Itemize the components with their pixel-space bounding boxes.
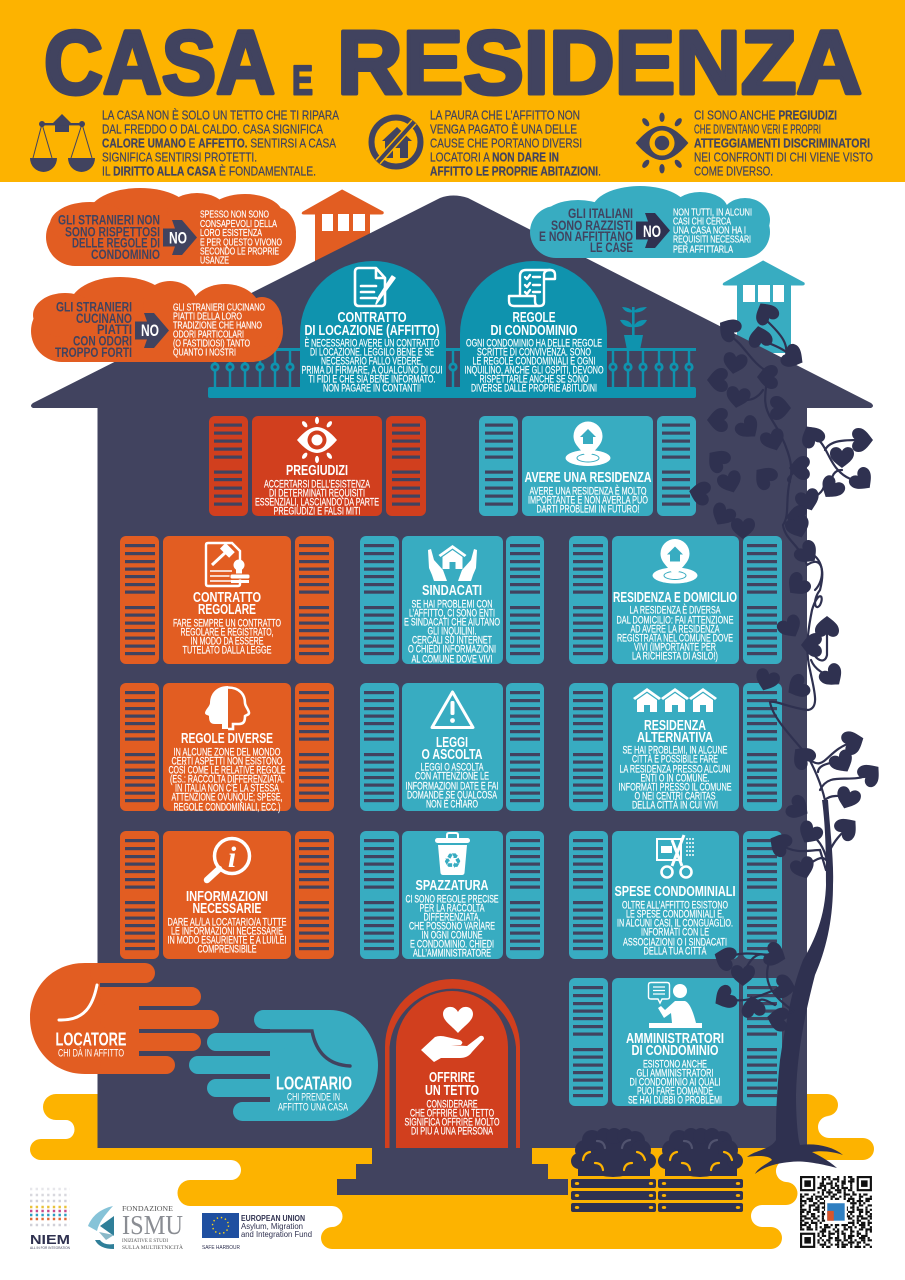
heading: ALTERNATIVA	[637, 730, 713, 746]
claim: DELLE REGOLE DI	[72, 236, 160, 250]
text: IMPORTANTE E NON AVERLA PUÒ	[528, 494, 648, 507]
text: LA CASA NON È SOLO UN TETTO CHE TI RIPARA	[102, 108, 339, 122]
logo: European Union fund	[202, 1213, 312, 1251]
claim: TROPPO FORTI	[55, 345, 132, 360]
icon: warning triangle	[432, 692, 473, 728]
panel: informazioni necessarie	[120, 831, 334, 959]
text: ENTI O IN COMUNE.	[640, 773, 710, 785]
text	[464, 338, 604, 395]
text: REGOLE CONDOMINIALI, ECC.)	[174, 801, 280, 813]
text: DARE AL/LA LOCATARIO/A TUTTE	[168, 917, 286, 929]
text: LA RICHIESTA DI ASILO!)	[632, 651, 718, 663]
logo: NIEM	[30, 1189, 70, 1250]
text: DARTI PROBLEMI IN FUTURO!	[536, 504, 640, 516]
text: PRIMA DI FIRMARE, A QUALCUNO DI CUI	[302, 365, 442, 377]
text: DI PIÙ A UNA PERSONA	[411, 1125, 494, 1138]
claim	[55, 300, 132, 360]
text: DOMANDE SE QUALCOSA	[407, 790, 498, 802]
house	[31, 196, 873, 1148]
claim: SONO RISPETTOSI	[65, 224, 160, 240]
cloud: stranieri regole	[46, 188, 296, 267]
heading: AMMINISTRATORI	[626, 1031, 724, 1047]
text: CON ATTENZIONE LE	[415, 771, 489, 783]
intro block: pregiudizi	[636, 108, 873, 178]
heading: INFORMAZIONI	[186, 889, 268, 905]
icon: no house	[372, 118, 420, 166]
logo: European Union fund: SAFE HARBOUR	[202, 1245, 240, 1251]
icon: scissors and bill	[657, 835, 695, 878]
text	[694, 108, 873, 178]
text	[528, 485, 648, 516]
text: E SINDACATI CHE AIUTANO	[404, 617, 500, 629]
text: ESISTONO ANCHE	[643, 1059, 707, 1071]
text: PER LA RACCOLTA	[420, 903, 485, 915]
heading: OFFRIRE	[429, 1070, 475, 1086]
panel: regole di condominio	[460, 261, 607, 398]
answer: CASI CHI CERCA	[673, 217, 731, 228]
QR code	[800, 1176, 872, 1248]
text: INQUILINO, ANCHE GLI OSPITI, DEVONO	[464, 365, 604, 377]
icon: location pin	[652, 539, 698, 584]
heading: SPAZZATURA	[416, 878, 489, 894]
icon: eye	[297, 417, 337, 463]
text: DIFFERENZIATA,	[424, 912, 480, 924]
answer: (O FASTIDIOSI) TANTO	[173, 339, 250, 350]
text: LE INFORMAZIONI NECESSARIE	[171, 926, 283, 938]
claim: E NON AFFITTANO	[539, 229, 633, 244]
arrow: no: NO	[169, 228, 187, 248]
intro block: diritto alla casa	[30, 108, 339, 178]
heading	[422, 735, 483, 763]
text: COSÌ COME LE RELATIVE REGOLE	[168, 764, 286, 777]
icon: hands holding house	[428, 545, 477, 581]
text: È NECESSARIO AVERE UN CONTRATTO	[304, 337, 440, 350]
heading	[637, 718, 713, 746]
answer: GLI STRANIERI CUCINANO	[173, 303, 265, 314]
text: CI SONO REGOLE PRECISE	[406, 894, 498, 906]
heading: LEGGI	[436, 735, 468, 751]
cloud: italiani	[530, 186, 770, 258]
logo: European Union fund: and Integration Fund	[241, 1230, 312, 1239]
text: VENGA PAGATO È UNA DELLE	[430, 122, 577, 136]
arrow: no: NO	[643, 222, 661, 241]
text: ATTEGGIAMENTI DISCRIMINATORI	[694, 136, 870, 150]
icon: recycling bin	[435, 833, 470, 875]
panel: residenza alternativa	[569, 683, 782, 812]
heading: RESIDENZA E DOMICILIO	[613, 590, 737, 606]
panel: residenza e domicilio	[569, 536, 782, 664]
heading: SINDACATI	[422, 583, 482, 599]
answer: QUANTO I NOSTRI	[173, 348, 236, 359]
heading: PREGIUDIZI	[286, 463, 348, 479]
text: INFORMAZIONI DATE E FAI	[406, 781, 498, 793]
balcony	[208, 348, 696, 398]
text: LE SPESE CONDOMINIALI E,	[626, 909, 724, 921]
heading: UN TETTO	[425, 1083, 479, 1099]
text: CAUSE CHE PORTANO DIVERSI	[430, 136, 582, 150]
hand: locatore	[30, 963, 219, 1074]
panel: spazzatura	[360, 831, 544, 960]
heading	[193, 590, 261, 618]
text: LOCATORI A NON DARE IN	[430, 150, 559, 164]
text: E CONDOMINIO. CHIEDI	[410, 939, 494, 951]
icon: location pin	[566, 422, 610, 466]
yellow ground	[30, 1094, 874, 1249]
heading: DI CONDOMINIO	[490, 323, 578, 339]
title: CASA	[44, 14, 275, 114]
text: REGISTRATA NEL COMUNE DOVE	[617, 633, 733, 645]
text: VIVI (IMPORTANTE PER	[634, 642, 716, 654]
text: INFORMATI PRESSO IL COMUNE	[618, 782, 732, 794]
text: AVERE UNA RESIDENZA È MOLTO	[530, 485, 646, 498]
title: RESIDENZA	[337, 14, 862, 114]
text: IN OGNI COMUNE	[422, 930, 482, 942]
claim: CONDOMINIO	[91, 247, 160, 262]
answer: PIATTI DELLA LORO	[173, 312, 242, 323]
text	[406, 762, 498, 811]
text: ASSOCIAZIONI O I SINDACATI	[623, 937, 727, 949]
text: DI CONDOMINIO AI QUALI	[630, 1077, 720, 1089]
text: SE HAI DUBBI O PROBLEMI	[628, 1095, 722, 1107]
text: (ES.: RACCOLTA DIFFERENZIATA.	[170, 774, 284, 786]
text: LA RESIDENZA È DIVERSA	[630, 604, 721, 617]
text: LEGGI O ASCOLTA	[420, 762, 484, 774]
text: AL COMUNE DOVE VIVI	[412, 653, 492, 665]
text: IN ITALIA NON C’È LA STESSA	[175, 782, 280, 795]
text	[404, 1099, 500, 1138]
text: O CHIEDI INFORMAZIONI	[408, 644, 496, 656]
icon: checklist scroll	[509, 270, 555, 306]
text: ACCERTARSI DELL’ESISTENZA	[264, 479, 371, 491]
claim: PIATTI	[97, 322, 132, 337]
heading: AVERE UNA RESIDENZA	[524, 470, 652, 486]
label: CHI PRENDE IN	[287, 1092, 340, 1104]
text: DELLA CITTÀ IN CUI VIVI	[632, 799, 718, 812]
heading: DI LOCAZIONE (AFFITTO)	[304, 323, 440, 339]
text: CHE POSSONO VARIARE	[409, 921, 495, 933]
text: OLTRE ALL’AFFITTO ESISTONO	[622, 900, 728, 912]
text: CITTÀ È POSSIBILE FARE	[632, 753, 718, 766]
text: IL DIRITTO ALLA CASA È FONDAMENTALE.	[102, 164, 316, 178]
text: SIGNIFICA OFFRIRE MOLTO	[404, 1117, 500, 1129]
text: LA PAURA CHE L’AFFITTO NON	[430, 108, 580, 122]
text: O NEI CENTRI CARITAS	[634, 791, 716, 803]
text: L’AFFITTO, CI SONO ENTI	[409, 608, 495, 620]
icon: scales with house	[30, 114, 95, 172]
claim: CUCINANO	[76, 311, 132, 326]
text	[617, 900, 733, 958]
text	[168, 747, 286, 813]
text: CERTI ASPETTI NON ESISTONO	[172, 756, 282, 768]
panel: amministratori di condominio	[569, 978, 782, 1107]
arrow: no: NO	[141, 321, 159, 340]
text: NECESSARIO FALLO VEDERE,	[321, 356, 423, 368]
claim: LE CASE	[590, 240, 633, 255]
heading	[490, 310, 578, 339]
text: REGOLARE E REGISTRATO,	[180, 627, 274, 639]
answer: LORO ESISTENZA	[200, 228, 262, 239]
heading: CONTRATTO	[338, 310, 406, 326]
text: PREGIUDIZI E FALSI MITI	[274, 506, 360, 518]
answer	[200, 210, 282, 267]
text: DAL DOMICILIO: FAI ATTENZIONE	[616, 615, 734, 627]
text: CHE OFFRIRE UN TETTO	[410, 1108, 494, 1120]
icon: document gavel stamp	[206, 543, 250, 586]
text: IN MODO DA ESSERE	[190, 636, 264, 648]
answer: CONSAPEVOLI DELLA	[200, 219, 277, 230]
answer	[673, 208, 752, 256]
text: TUTELATO DALLA LEGGE	[182, 645, 272, 657]
answer	[173, 303, 265, 359]
icon: administrator speaking	[648, 982, 702, 1028]
header band	[0, 0, 905, 182]
text: CI SONO ANCHE PREGIUDIZI	[694, 108, 837, 122]
text: LE REGOLE CONDOMINIALI E OGNI	[472, 356, 596, 368]
text: SCRITTE DI CONVIVENZA. SONO	[477, 347, 591, 359]
cloud: stranieri odori	[31, 277, 283, 362]
left chimney	[302, 190, 383, 264]
panel: pregiudizi	[209, 416, 426, 518]
text: DELLA TUA CITTÀ	[644, 945, 707, 958]
text	[406, 894, 498, 960]
icon: heart in hand	[421, 1007, 484, 1062]
icon: recycling bin: ♻	[443, 849, 462, 873]
label	[56, 1030, 126, 1060]
logo: Fondazione ISMU: ISMU	[122, 1210, 183, 1240]
arrow: no	[636, 213, 670, 248]
text: OGNI CONDOMINIO HA DELLE REGOLE	[466, 338, 602, 350]
stairs	[337, 1148, 568, 1195]
text	[173, 618, 281, 657]
icon: eye	[636, 113, 688, 173]
logo: Fondazione ISMU	[88, 1204, 183, 1251]
text	[618, 745, 732, 812]
text: DI LOCAZIONE. LEGGILO BENE E SE	[310, 347, 434, 359]
text: PUOI FARE DOMANDE	[637, 1086, 713, 1098]
heading	[186, 889, 268, 917]
heading: O ASCOLTA	[422, 747, 483, 763]
intro block: paura affitto	[372, 108, 601, 178]
title	[44, 14, 862, 114]
text: NON PAGARE IN CONTANTI!	[323, 383, 421, 395]
planters	[571, 1128, 743, 1212]
heading: RESIDENZA	[644, 718, 706, 734]
heading	[425, 1070, 479, 1099]
answer: USANZE	[200, 256, 229, 267]
heading	[626, 1031, 724, 1059]
text: FARE SEMPRE UN CONTRATTO	[173, 618, 281, 630]
claim: CON ODORI	[73, 333, 132, 348]
door: offrire un tetto	[385, 979, 520, 1148]
label: LOCATORE	[56, 1030, 126, 1050]
text: DI DETERMINATI REQUISITI	[269, 488, 365, 500]
text: SE HAI PROBLEMI CON	[412, 599, 492, 611]
icon: three houses	[633, 688, 717, 712]
text: ALL’AMMINISTRATORE	[413, 948, 491, 960]
answer: ODORI PARTICOLARI	[173, 330, 244, 341]
text: INFORMATI CON LE	[641, 927, 709, 939]
title: E	[292, 56, 313, 104]
text	[255, 479, 379, 518]
answer: E PER QUESTO VIVONO	[200, 237, 282, 248]
text	[616, 604, 734, 663]
claim	[58, 212, 160, 262]
text: LA RESIDENZA PRESSO ALCUNI	[620, 764, 730, 776]
heading: NECESSARIE	[192, 901, 262, 917]
heading	[304, 310, 440, 339]
icon: document with pen	[355, 268, 395, 306]
arrow: no	[163, 220, 197, 255]
text	[302, 337, 442, 395]
text: ATTENZIONE OVUNQUE; SPESE,	[172, 792, 282, 804]
panel: spese condominiali	[569, 831, 782, 959]
icon: two-faced head	[205, 686, 249, 729]
icon: magnifier info: i	[228, 841, 237, 874]
text	[102, 108, 339, 178]
text: GLI INQUILINI.	[428, 626, 476, 638]
answer: NON TUTTI, IN ALCUNI	[673, 208, 752, 219]
text: COME DIVERSO.	[694, 164, 773, 178]
label: AFFITTO UNA CASA	[278, 1102, 349, 1114]
heading: REGOLE	[512, 310, 556, 326]
text: AFFITTO LE PROPRIE ABITAZIONI.	[430, 164, 601, 178]
claim: GLI ITALIANI	[568, 206, 633, 221]
icon: magnifier info	[207, 838, 250, 880]
answer: UNA CASA NON HA I	[673, 226, 746, 237]
panel: contratto regolare	[120, 536, 334, 664]
logo: Fondazione ISMU: INIZIATIVE E STUDI	[122, 1239, 168, 1244]
label	[276, 1074, 352, 1114]
text: SE HAI PROBLEMI, IN ALCUNE	[622, 745, 728, 757]
label: CHI DÀ IN AFFITTO	[58, 1047, 124, 1060]
logo: NIEM: NIEM	[30, 1232, 70, 1247]
logo: European Union fund: EUROPEAN UNION	[241, 1214, 305, 1223]
text: DIVERSE DALLE PROPRIE ABITUDINI	[471, 383, 597, 395]
heading: REGOLARE	[198, 602, 256, 618]
claim: SONO RAZZISTI	[551, 218, 633, 233]
text: GLI AMMINISTRATORI	[636, 1068, 714, 1080]
logo: Fondazione ISMU: FONDAZIONE	[122, 1204, 173, 1213]
hand: locatario	[189, 1010, 378, 1121]
heading: DI CONDOMINIO	[632, 1043, 718, 1059]
tree and ivy	[687, 297, 886, 1174]
panel: contratto di locazione	[300, 261, 446, 398]
text: IN ALCUNE ZONE DEL MONDO	[174, 747, 280, 759]
logo: European Union fund: Asylum, Migration	[241, 1222, 303, 1231]
logo: Fondazione ISMU: SULLA MULTIETNICITÀ	[122, 1245, 183, 1251]
answer: TRADIZIONE CHE HANNO	[173, 321, 262, 332]
text: CONSIDERARE	[426, 1099, 478, 1111]
text: CALORE UMANO E AFFETTO. SENTIRSI A CASA	[102, 136, 336, 150]
claim: GLI STRANIERI	[56, 300, 132, 315]
heading: REGOLE DIVERSE	[181, 731, 273, 747]
arrow: no	[135, 313, 169, 348]
logo: NIEM: ALL IN FOR INTEGRATION	[30, 1246, 70, 1250]
text: IN ALCUNI CASI, IL CONGUAGLIO.	[617, 918, 733, 930]
panel: leggi o ascolta	[360, 683, 544, 811]
text: RISPETTARLE ANCHE SE SONO	[480, 374, 588, 386]
text: SIGNIFICA SENTIRSI PROTETTI.	[102, 150, 257, 164]
label: LOCATARIO	[276, 1074, 352, 1094]
panel: sindacati	[360, 536, 544, 665]
answer: REQUISITI NECESSARI	[673, 235, 751, 246]
text: AD AVERE LA RESIDENZA	[630, 624, 720, 636]
text: TI FIDI E CHE SIA BENE INFORMATO.	[308, 374, 436, 386]
answer: SPESSO NON SONO	[200, 210, 269, 221]
text	[628, 1059, 722, 1107]
text: COMPRENSIBILE	[198, 944, 256, 956]
icon: potted plant	[620, 307, 647, 350]
text: IN MODO ESAURIENTE E A LUI/LEI	[168, 935, 286, 947]
panel: regole diverse	[120, 683, 334, 813]
claim: GLI STRANIERI NON	[58, 212, 160, 228]
text: CHE DIVENTANO VERI E PROPRI	[694, 122, 821, 136]
text: CERCALI SU INTERNET	[412, 635, 492, 647]
panel: avere una residenza	[479, 416, 696, 516]
answer: PER AFFITTARLA	[673, 245, 733, 256]
text	[168, 917, 286, 956]
text: DAL FREDDO O DAL CALDO. CASA SIGNIFICA	[102, 122, 323, 136]
right chimney	[723, 261, 804, 353]
claim	[539, 206, 633, 255]
text	[430, 108, 601, 178]
text	[404, 599, 500, 665]
answer: SECONDO LE PROPRIE	[200, 246, 279, 257]
heading: CONTRATTO	[193, 590, 261, 606]
heading: SPESE CONDOMINIALI	[614, 884, 736, 900]
text: ESSENZIALI, LASCIANDO DA PARTE	[255, 497, 379, 509]
text: NON È CHIARO	[426, 798, 478, 811]
